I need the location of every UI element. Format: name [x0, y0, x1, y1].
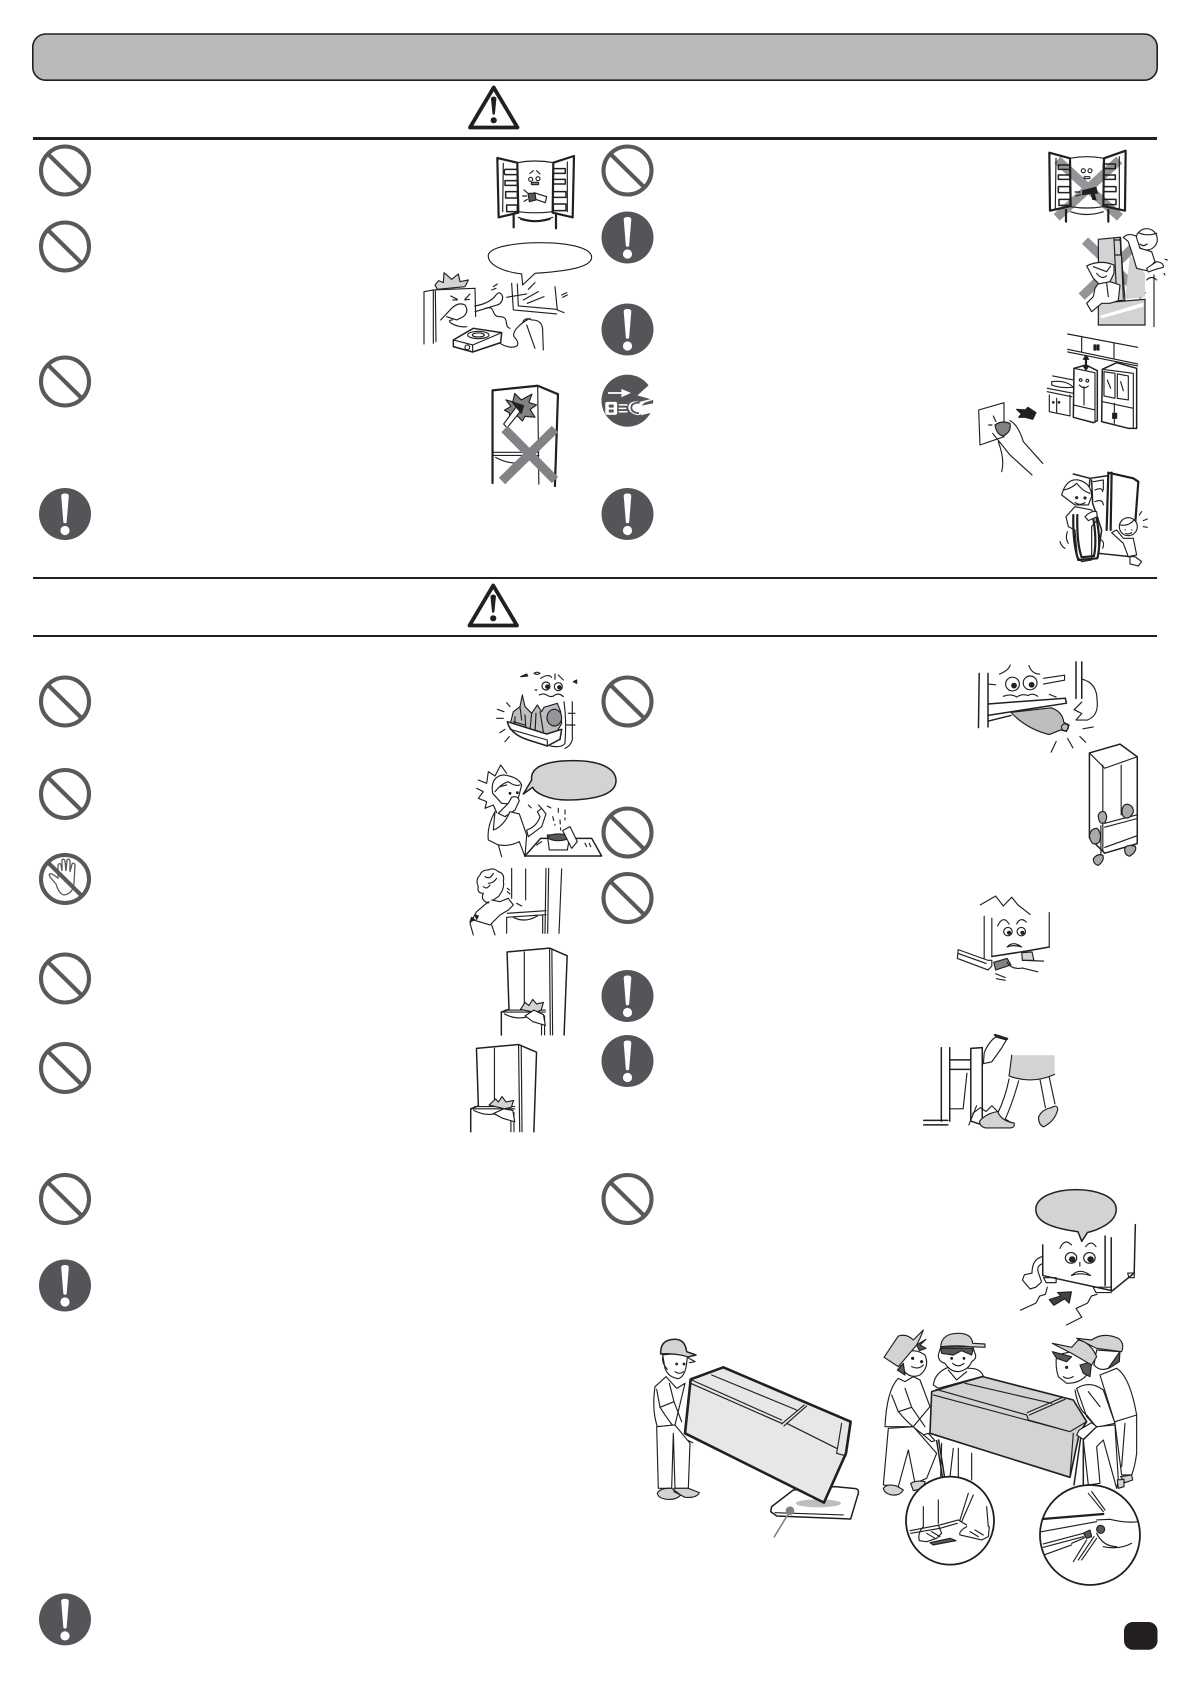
mover 1 — [883, 1330, 937, 1495]
illustration: hair dryer in fridge with cross — [1049, 151, 1126, 222]
illustration: PET bottle under shelf — [978, 662, 1097, 752]
illustration: woman smelling vapors — [477, 765, 602, 857]
icon: do not touch — [41, 855, 89, 903]
page number tab — [1124, 1622, 1158, 1650]
illustration: parent and child at fridge doors — [1060, 473, 1147, 566]
icon: mandatory right 1 — [602, 212, 654, 264]
fridge box — [930, 1377, 1087, 1477]
caution section top rule — [33, 577, 1157, 579]
warning triangle icon — [470, 88, 518, 128]
illustration: four movers lifting fridge — [883, 1330, 1137, 1495]
caution triangle icon — [470, 586, 517, 626]
icon: unplug — [601, 375, 663, 427]
icon: mandatory 2 — [39, 1260, 91, 1312]
illustration: flashlight in fridge — [497, 156, 574, 228]
icon: prohibited right 3 — [604, 808, 652, 856]
illustration: gas smell, fridge and stove — [424, 273, 567, 352]
icon: prohibited right 1 — [604, 146, 652, 194]
icon: prohibited right 2 — [604, 678, 652, 726]
speech bubble: gray — [523, 761, 616, 800]
illustration: fridge on uneven floor — [1021, 1225, 1135, 1325]
illustration: fridge door pinching hand — [501, 948, 567, 1035]
caution section bottom rule — [33, 635, 1157, 637]
icon: prohibited 3 — [41, 358, 89, 406]
illustration: fridge with wheels and burst — [1089, 744, 1137, 865]
icon: mandatory right 5 — [602, 1035, 654, 1087]
icon: prohibited 5 — [41, 770, 89, 818]
warning section rule — [33, 137, 1157, 140]
icon: prohibited 8 — [41, 1175, 89, 1223]
icon: prohibited right 5 — [604, 1175, 652, 1223]
illustration: hammer hitting fridge door — [493, 386, 558, 486]
icon: mandatory right 3 — [602, 488, 654, 540]
callout circle: hands at handle — [1040, 1485, 1140, 1585]
illustration: one person tilting fridge on a pad — [654, 1339, 858, 1537]
illustration: hand under fridge feet — [957, 896, 1049, 980]
icon: prohibited 2 — [41, 222, 89, 270]
speech bubble: fridge complaint — [1036, 1190, 1116, 1241]
icon: mandatory right 2 — [602, 304, 654, 356]
icon: prohibited 7 — [41, 1044, 89, 1092]
mover 2 — [933, 1333, 985, 1480]
header banner — [33, 34, 1157, 80]
icon: mandatory right 4 — [602, 970, 654, 1022]
illustration: children climbing fridge with cross — [1082, 229, 1167, 327]
illustration: second fridge door pinching hand — [471, 1045, 537, 1132]
speech bubble: open window — [488, 243, 592, 285]
callout circle: hands at bottom — [906, 1438, 1083, 1565]
icon: prohibited 1 — [41, 146, 89, 194]
icon: prohibited right 4 — [604, 874, 652, 922]
illustration: door catching slipper — [924, 1035, 1058, 1128]
gray cross over hammer fridge — [502, 429, 555, 481]
mover 4 — [1077, 1335, 1137, 1483]
icon: prohibited 4 — [41, 678, 89, 726]
mover 3 — [1052, 1340, 1124, 1488]
illustration: woman reaching into fridge — [470, 868, 562, 935]
illustration: kitchen installation clearance — [979, 334, 1138, 475]
icon: mandatory 3 — [39, 1593, 91, 1645]
icon: prohibited 6 — [41, 954, 89, 1002]
icon: mandatory 1 — [39, 488, 91, 540]
illustration: bottles in door pocket — [497, 672, 577, 748]
